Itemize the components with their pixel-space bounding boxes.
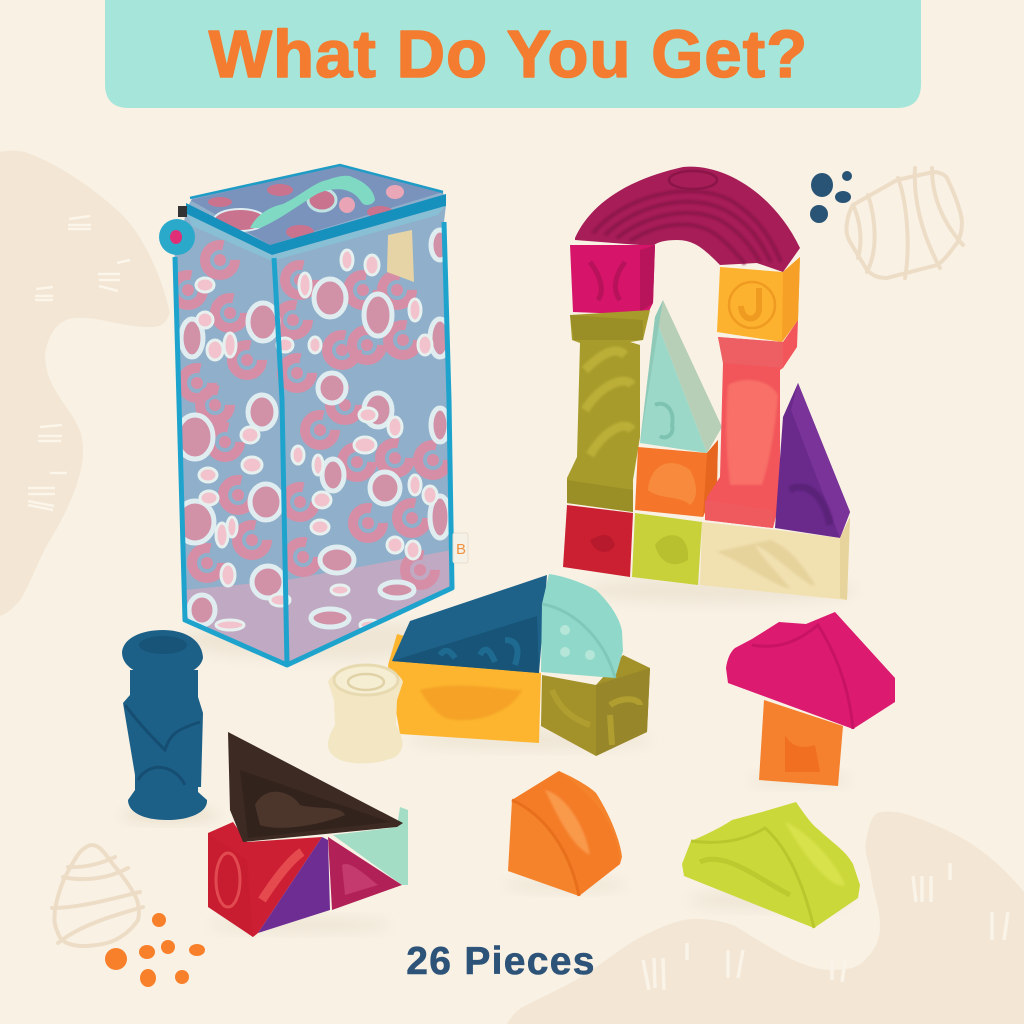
bag frame seams (175, 222, 452, 665)
arch (575, 167, 800, 272)
purple triangle (775, 383, 850, 538)
brown wedge (228, 732, 403, 842)
cream cylinder (328, 665, 403, 763)
bag handle (250, 176, 375, 228)
olive cube (541, 655, 650, 756)
lime cube (632, 513, 702, 585)
bag zipper pull (159, 206, 195, 255)
block group: centre (328, 574, 650, 763)
teal triangle (392, 575, 547, 673)
crimson triangle (328, 837, 402, 910)
icon: sketched barrel (846, 168, 963, 278)
purple triangle (258, 837, 330, 933)
block: orange wedge (505, 771, 625, 896)
crimson block (570, 245, 655, 315)
orange square (635, 440, 718, 517)
column cap (122, 630, 203, 677)
bag label (387, 230, 414, 282)
bag tag: B (456, 541, 466, 558)
header banner (105, 0, 921, 108)
block group: teal column (122, 630, 218, 823)
block group: magenta and orange (726, 612, 895, 787)
coral column (705, 320, 798, 528)
decorative blob: left (0, 151, 170, 616)
yellow block (388, 634, 541, 743)
red cube (208, 822, 322, 937)
icon: sketched egg (52, 845, 143, 946)
mint triangle (640, 300, 722, 453)
block group: bottom left (208, 732, 408, 937)
cream block (700, 517, 850, 600)
bag top lid (190, 165, 443, 245)
block: lime wedge (682, 802, 860, 928)
mint block (333, 807, 408, 885)
title: What Do You Get? (209, 17, 808, 92)
red cube (563, 505, 633, 577)
block stack: arch tower (563, 167, 855, 604)
icon: orange dots (105, 913, 205, 987)
olive column (567, 310, 650, 512)
bag tag (453, 533, 468, 563)
caption: 26 Pieces (406, 940, 596, 983)
mesh storage bag (159, 160, 468, 670)
icon: blue dots (810, 171, 852, 223)
mint quarter (541, 574, 623, 678)
orange top block (717, 257, 800, 342)
decorative blob: bottom right (507, 812, 1024, 1024)
bag zipper band (186, 194, 446, 255)
